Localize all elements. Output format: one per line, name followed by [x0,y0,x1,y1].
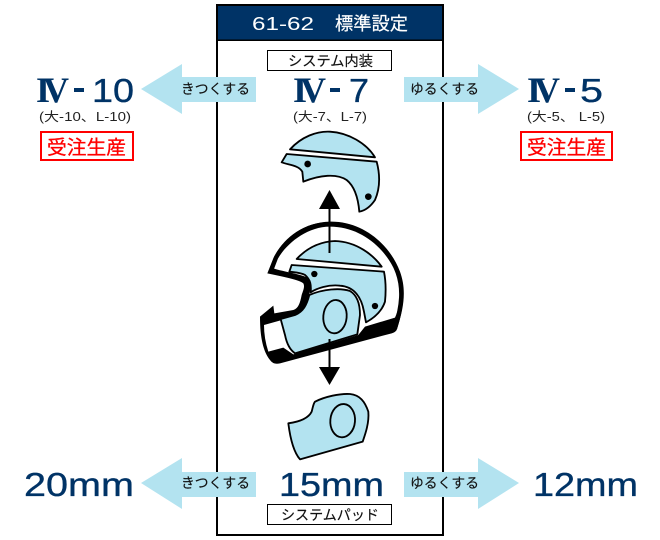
arrow: looser, bottom [404,458,519,509]
panel header: 標準設定 [335,14,408,34]
size IV-5 [527,70,603,110]
arrow: tighter, top: きつくする [181,81,250,97]
size IV-7: IV [293,70,326,110]
size IV-10: 10 [92,72,134,109]
thickness 15mm: 15mm [279,466,384,503]
panel header: 61-62 [252,14,314,34]
size IV-10 [36,70,134,110]
arrow: looser, top: ゆるくする [410,81,479,97]
size IV-10: IV [36,70,69,110]
badge: made to order left: 受注生産 [47,137,126,159]
badge: made to order right [521,132,612,160]
size IV-7: 7 [349,72,369,109]
badge: made to order right: 受注生産 [527,137,606,159]
helmet cheek pad piece [288,394,368,459]
arrow: tighter, top [141,64,256,114]
arrow: tighter, bottom: きつくする [181,475,250,491]
panel header [218,6,442,41]
center panel [217,5,443,535]
thickness 12mm: 12mm [533,466,638,503]
thickness 20mm: 20mm [24,466,134,503]
label: system pad: システムパッド [281,507,379,523]
helmet cross-section [260,222,404,364]
size note left: (大-10、L-10) [39,110,131,124]
arrow: tighter, bottom [141,458,256,509]
arrow: up [319,190,340,253]
arrow: looser, top [404,64,519,114]
label: system liner: システム内装 [288,53,373,69]
label: system pad [268,504,392,524]
size IV-7 [293,70,369,110]
label: system liner [268,50,392,70]
helmet top liner piece [282,132,379,212]
arrow: down [319,339,340,385]
size IV-5: IV [527,70,560,110]
size IV-5: 5 [580,72,603,109]
badge: made to order left [41,132,133,160]
arrow: looser, bottom: ゆるくする [410,475,479,491]
size note center: (大-7、L-7) [293,110,367,124]
size note right: (大-5、 L-5) [527,110,605,124]
